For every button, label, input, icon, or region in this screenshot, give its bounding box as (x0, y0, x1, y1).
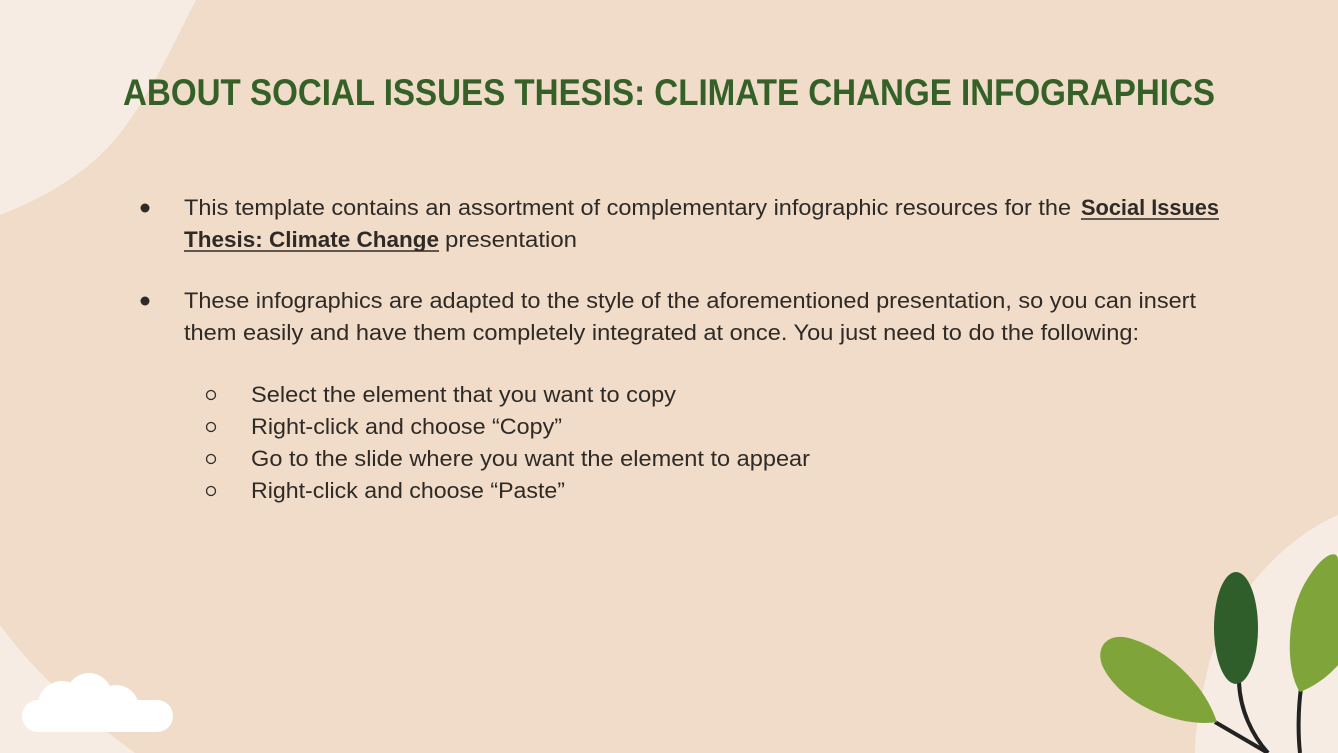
bullet 1: Thesis: Climate Change (184, 227, 439, 252)
icon: cloud (22, 673, 173, 732)
bullet 2 (140, 288, 1196, 345)
decorative blob: top-left (0, 0, 196, 215)
bullet 1: presentation (445, 227, 577, 252)
sub-list: Select the element that you want to copy (251, 382, 676, 407)
title: ABOUT SOCIAL ISSUES THESIS: CLIMATE CHANGE INFOGRAPHICS (123, 72, 1215, 113)
decorative blob: bottom-right (1195, 515, 1338, 753)
icon: plant leaves (1100, 554, 1338, 753)
bullet 1: This template contains an assortment of complementary infographic resources for the (184, 195, 1071, 220)
bullet 2: These infographics are adapted to the style of the aforementioned presentation, so you can insert (184, 288, 1196, 313)
sub-list: Right-click and choose “Paste” (251, 478, 565, 503)
bullet 1: Social Issues (1081, 195, 1219, 220)
sub-list: Go to the slide where you want the element to appear (251, 446, 810, 471)
bullet 2: them easily and have them completely integrated at once. You just need to do the following: (184, 320, 1139, 345)
decorative blob: bottom-left (0, 625, 135, 753)
text block: bullet list (140, 195, 1219, 503)
sub-list: Right-click and choose “Copy” (251, 414, 562, 439)
bullet 1 (140, 195, 1219, 252)
sub-list (206, 382, 810, 503)
